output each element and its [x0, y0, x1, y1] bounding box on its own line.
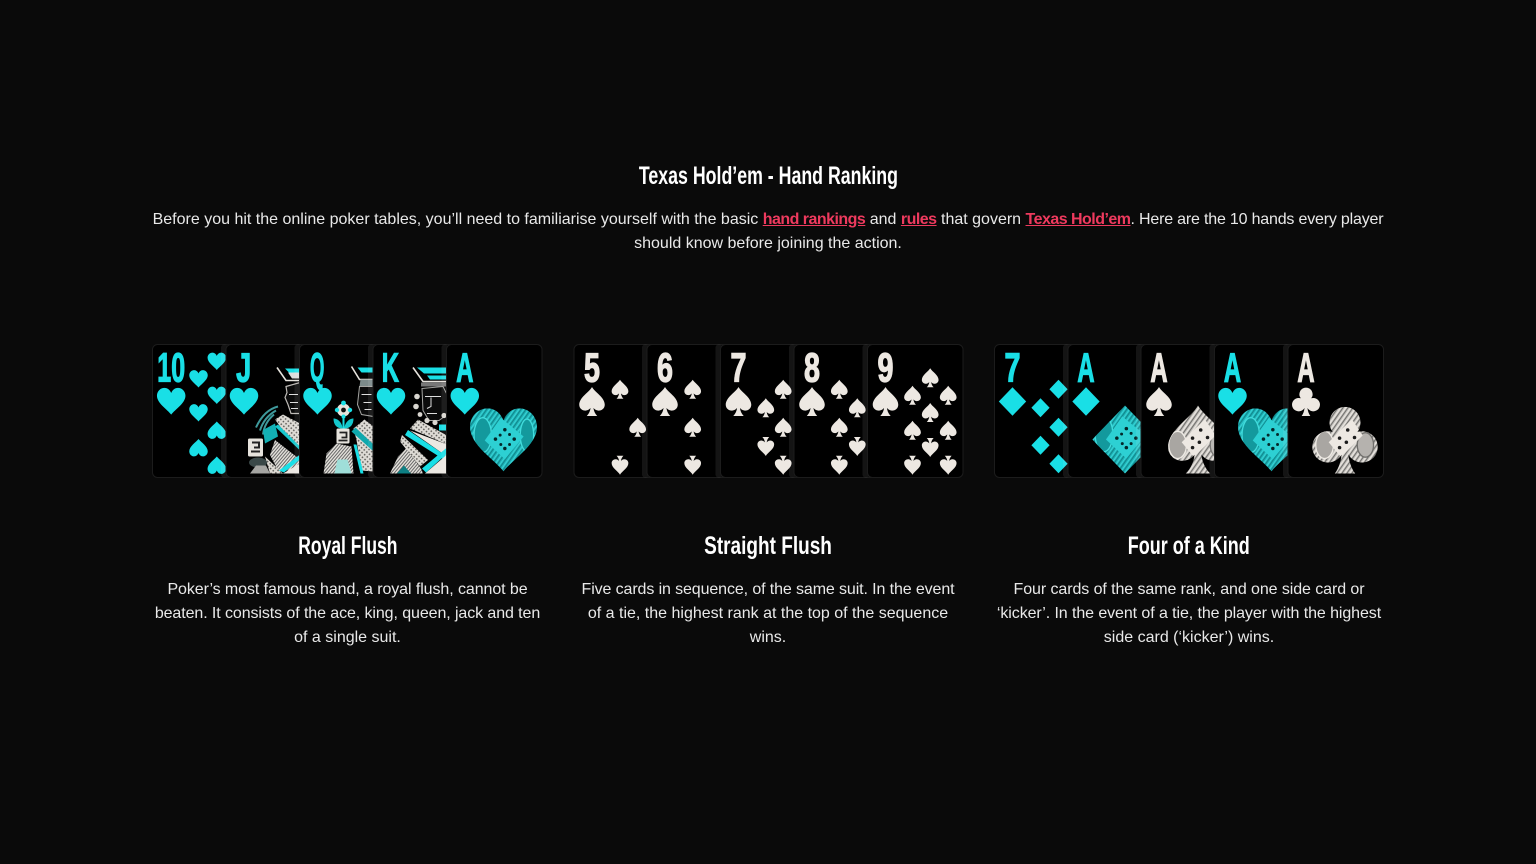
heading: royal flush: Royal Flush: [298, 532, 397, 560]
card: ace of clubs: A: [1297, 346, 1315, 391]
description: four of a kind: Four cards of the same rank, and one side card or: [1014, 581, 1364, 598]
hand: straight flush: [574, 344, 963, 478]
card: ace of clubs: [1283, 344, 1386, 480]
heading: four of a kind: Four of a Kind: [1128, 532, 1250, 560]
card: 6 of spades: [642, 344, 742, 478]
card: 8 of spades: [789, 344, 890, 478]
card: 7 of spades: [716, 344, 816, 478]
card: jack of hearts: [221, 344, 322, 478]
queen figure: [324, 366, 374, 474]
card: ace of diamonds: [1063, 344, 1144, 478]
jack figure: [248, 368, 300, 474]
patterned spade: [1168, 406, 1214, 474]
patterned heart: [1238, 408, 1288, 472]
card: 6 of spades: 6: [657, 346, 673, 391]
card: 9 of spades: [862, 344, 963, 478]
description: four of a kind: side card (‘kicker’) wins.: [1104, 629, 1274, 646]
flower: [334, 401, 354, 430]
panel: four of a kind text: [997, 532, 1382, 646]
card: ace of hearts: [442, 344, 544, 481]
card: 10 of hearts: [152, 344, 248, 478]
intro text: Before you hit the online poker tables, you’ll need to familiarise yourself with the basic hand rankings and rules that govern Texas Hold’em. Here are the 10 hands every player: [153, 211, 1383, 228]
description: four of a kind: [997, 581, 1382, 646]
hand: four of a kind: [994, 344, 1386, 481]
card: 7 of diamonds: [994, 344, 1090, 478]
card: ace of spades: A: [1150, 346, 1168, 391]
description: straight flush: of a tie, the highest rank at the top of the sequence: [588, 605, 948, 622]
panel: royal flush text: [155, 532, 540, 646]
patterned club: [1312, 406, 1378, 474]
description: straight flush: [582, 581, 954, 646]
card: king of hearts: K: [382, 346, 399, 391]
description: royal flush: [155, 581, 540, 646]
card illustrations: [152, 344, 1384, 478]
title: Texas Hold’em - Hand Ranking: [638, 162, 898, 190]
card: ace of hearts: A: [456, 346, 473, 391]
description: royal flush: Poker’s most famous hand, a royal flush, cannot be: [167, 581, 528, 598]
card: 10 of hearts: 10: [157, 345, 185, 391]
heading: straight flush: Straight Flush: [704, 532, 832, 560]
card: 7 of diamonds: 7: [1005, 346, 1020, 391]
intro text: should know before joining the action.: [634, 235, 902, 252]
card: king of hearts: [368, 344, 468, 478]
card: jack of hearts: J: [236, 346, 251, 391]
description: royal flush: of a single suit.: [294, 629, 401, 646]
intro text: [153, 211, 1384, 252]
card: 5 of spades: [574, 344, 670, 478]
card: 5 of spades: 5: [584, 346, 600, 391]
king figure: [390, 368, 447, 474]
card: queen of hearts: [294, 344, 395, 478]
description: straight flush: Five cards in sequence, of the same suit. In the event: [582, 581, 954, 598]
hand: royal flush: [152, 344, 544, 481]
card: queen of hearts: Q: [310, 344, 324, 391]
card: 7 of spades: 7: [731, 346, 746, 391]
card: ace of hearts: [1210, 344, 1292, 478]
card: ace of hearts: A: [1224, 346, 1241, 391]
panel: straight flush text: [582, 532, 954, 646]
card: ace of spades: [1136, 344, 1218, 478]
description: royal flush: beaten. It consists of the ace, king, queen, jack and ten: [155, 605, 540, 622]
description: four of a kind: ‘kicker’. In the event of a tie, the player with the highest: [997, 605, 1381, 622]
patterned diamond: [1092, 406, 1140, 474]
card: 9 of spades: 9: [878, 346, 893, 391]
card: 8 of spades: 8: [804, 346, 820, 391]
description: straight flush: wins.: [750, 629, 786, 646]
card: ace of diamonds: A: [1077, 346, 1095, 391]
patterned heart: [470, 408, 537, 472]
